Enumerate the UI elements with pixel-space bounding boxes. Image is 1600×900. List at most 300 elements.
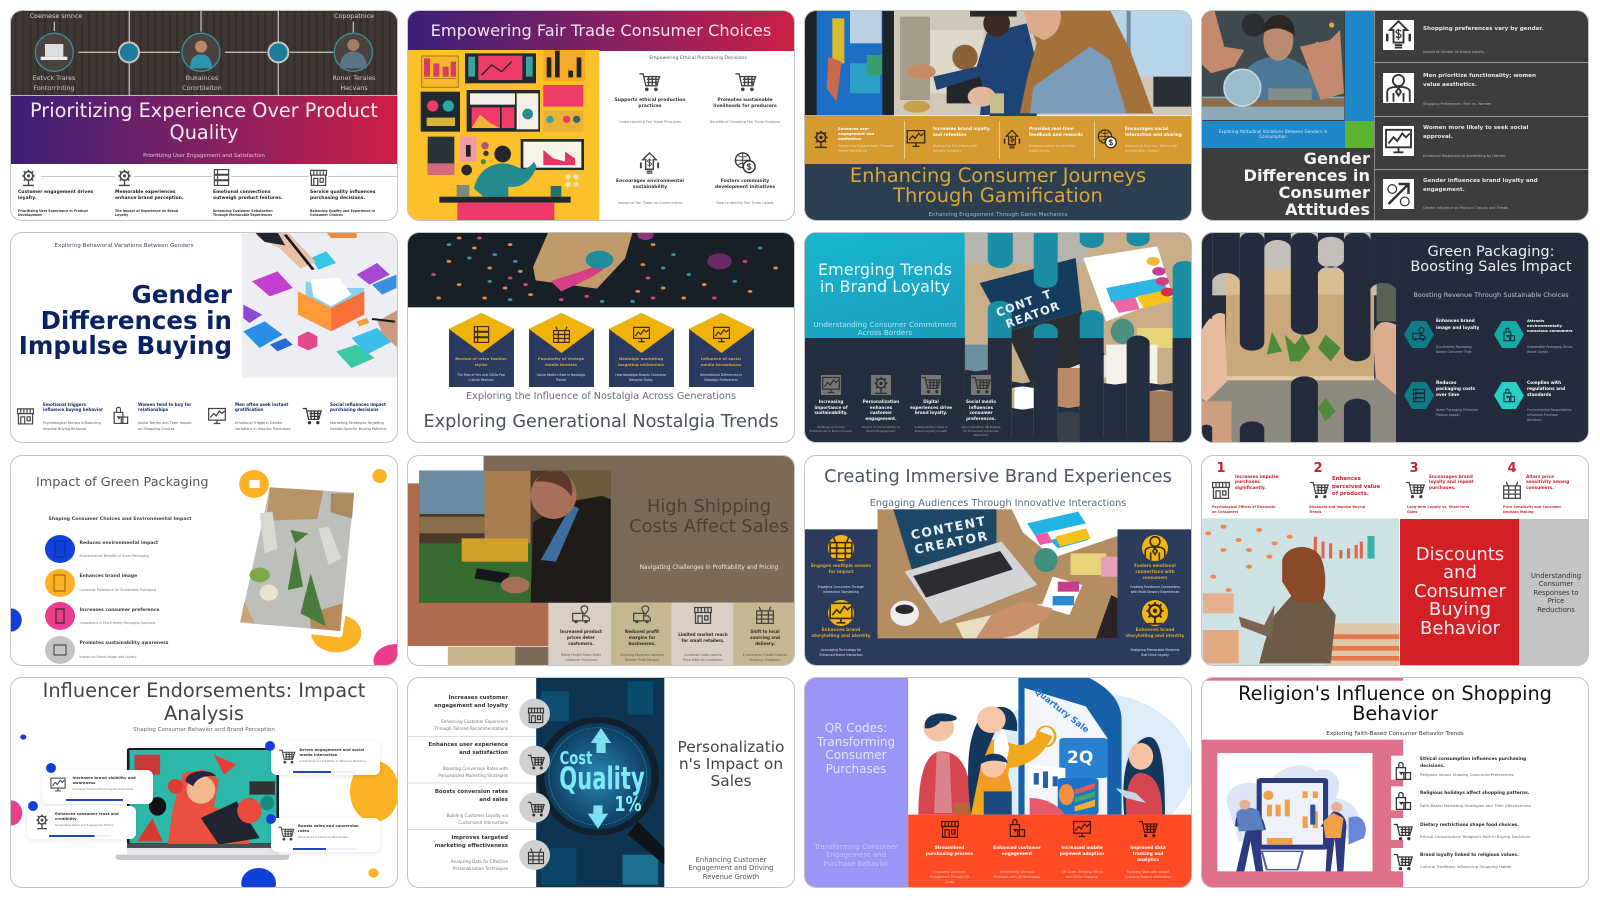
- point 1: [560, 629, 602, 646]
- title: [1410, 245, 1572, 275]
- point 4: Alters price: [1526, 475, 1554, 480]
- point 3: experiences drive: [910, 405, 952, 410]
- point 3: brand loyalty.: [915, 410, 947, 415]
- detail 4: Boosting Sales with Instant: [1127, 870, 1169, 874]
- card 1: [449, 313, 514, 388]
- icon: monitor: [207, 406, 227, 426]
- icon: bag: [111, 405, 130, 426]
- screen text: Quartury Sale: [1032, 687, 1091, 735]
- point 4: [1526, 475, 1569, 491]
- point 1: loyalty.: [18, 196, 37, 201]
- screen text: REATOR: [1004, 298, 1062, 331]
- detail 3: [683, 652, 723, 664]
- title: High Shipping: [647, 496, 771, 517]
- detail 3: Impact of Fair Trade on Communities: [618, 201, 682, 205]
- icon: cart: [639, 73, 660, 92]
- detail 4: Nostalgic Preferences: [704, 378, 738, 382]
- right point 2: [1126, 628, 1184, 640]
- point 2: Reduced profit: [625, 629, 659, 634]
- point 4: sourcing and: [750, 635, 780, 640]
- gold circle icon: [1142, 535, 1168, 561]
- diagram label: [332, 74, 376, 92]
- point 2: [1332, 476, 1380, 498]
- point 2: [625, 629, 659, 646]
- subtitle: Exploring Faith-Based Consumer Behavior Trends: [1326, 731, 1464, 737]
- badge: [46, 763, 56, 773]
- point 1: influence buying behavior: [43, 407, 103, 412]
- icon: truck: [571, 605, 591, 625]
- detail 3: Long-term Loyalty vs. Short-term: [1407, 504, 1469, 508]
- point 3: [678, 632, 728, 644]
- point 2: Popularity of vintage: [538, 356, 584, 361]
- point 2: [863, 399, 899, 421]
- detail 2: Reward Systems: [933, 149, 961, 153]
- detail 2: [994, 870, 1040, 880]
- point 2: Religious holidays affect shopping patterns.: [1420, 791, 1529, 796]
- detail 4: Measuring Success: Metrics for: [1125, 144, 1178, 148]
- point 3: feedback and rewards: [1029, 133, 1083, 138]
- title: Differences in: [41, 306, 232, 334]
- right detail 1: [1130, 584, 1180, 595]
- icon: cart: [302, 406, 322, 426]
- detail 3: [914, 425, 948, 433]
- detail 4: [330, 421, 386, 432]
- point 3: loyalty and repeat: [1429, 480, 1473, 485]
- detail 4: [1125, 870, 1171, 880]
- detail 2: Social Media's Role in Nostalgic: [537, 373, 585, 377]
- left detail 2: Enhanced Brand Interaction: [819, 653, 863, 657]
- divider: [999, 121, 1000, 159]
- detail 1: Understanding Fair Trade Principles: [619, 120, 681, 124]
- title: [850, 164, 1146, 207]
- detail 1: Culture Revivals: [468, 378, 494, 382]
- detail 3: Building Customer Loyalty via: [447, 813, 508, 818]
- icon box: [971, 375, 991, 395]
- card text 1: awareness: [72, 780, 95, 785]
- detail 1: Psychological Effects of Discounts: [1212, 504, 1275, 508]
- divider lines: [41, 176, 397, 177]
- gold band: [804, 116, 1192, 164]
- point 2: [933, 126, 990, 138]
- point 1: Ethical consumption influences purchasing: [1420, 757, 1526, 762]
- point 1: [1420, 757, 1526, 770]
- diagram label: Eetvck Trares: [33, 74, 75, 82]
- icon: cart: [1138, 819, 1158, 839]
- detail 4: Cultural Traditions Influencing Shopping Habits: [1420, 864, 1511, 869]
- row rule: [1374, 116, 1589, 117]
- panel: personalization: [407, 677, 795, 888]
- panel: discounts: [1201, 455, 1589, 666]
- icon: monitor: [49, 776, 67, 793]
- panel: gamification: [804, 10, 1192, 221]
- detail 1: Environmental Benefits of Green Packaging: [80, 554, 149, 558]
- subtitle: Consumption: [1259, 134, 1287, 139]
- point 4: Influence of social: [701, 356, 741, 361]
- detail 4: Environmental Responsibility: [1527, 408, 1572, 412]
- detail 1: Codes: [945, 880, 954, 884]
- left detail 1: Interactive Storytelling: [823, 590, 859, 594]
- subtitle: Shaping Consumer Behavior and Brand Perception: [133, 727, 275, 733]
- title: Creating Immersive Brand Experiences: [824, 466, 1172, 487]
- diagram label: Corortileiton: [182, 84, 222, 92]
- card 2: [529, 313, 594, 388]
- left point 1: Engages multiple senses: [811, 564, 871, 569]
- detail 2: Motivating Purchases with: [933, 144, 977, 148]
- point 1: [43, 402, 103, 412]
- right detail 1: with Multi-Sensory Experiences: [1131, 590, 1179, 594]
- point 4: tracking and: [1133, 852, 1163, 857]
- detail 4: Shipping Challenges: [749, 658, 781, 662]
- point 3: Emotional connections: [213, 190, 271, 195]
- icon box: [921, 375, 941, 395]
- detail 3: [1029, 144, 1075, 153]
- screen text: CONTENT: [909, 513, 988, 542]
- icon: cart: [1405, 480, 1425, 500]
- diagram label: Roner Teraies: [332, 74, 376, 82]
- number 2: 2: [1313, 461, 1323, 476]
- right point 1: consumers: [1142, 575, 1168, 580]
- detail 4: Personalization Strategies: [961, 425, 1001, 429]
- title: Behavior: [1352, 702, 1438, 725]
- point 3: and sales: [479, 797, 508, 803]
- detail 3: Emotional Triggers: Gender: [235, 421, 283, 425]
- left point 1: for impact: [829, 570, 853, 575]
- panel: gender attitudes: [1201, 10, 1589, 221]
- title: Quality: [170, 121, 238, 144]
- title: Buying: [1429, 599, 1491, 620]
- detail 3: Personalization in Gamified: [1029, 144, 1075, 148]
- panel: green packaging sales: [1201, 232, 1589, 443]
- point 2: and satisfaction: [459, 750, 508, 756]
- point 3: [618, 356, 664, 368]
- point 3: Reduces: [1436, 381, 1456, 386]
- point 4: Service quality influences: [310, 190, 375, 195]
- right point 1: Fosters emotional: [1134, 563, 1176, 568]
- point 1: [1235, 475, 1279, 491]
- point 3: Digital: [923, 399, 939, 404]
- detail 1: [18, 208, 88, 217]
- right point 1: [1134, 563, 1176, 581]
- point 2: Enhances brand image: [80, 574, 137, 579]
- icon: globe: [632, 325, 651, 344]
- point 4: [1125, 126, 1182, 138]
- point 2: Promotes sustainable: [717, 98, 773, 103]
- detail 3: Customized Interactions: [458, 820, 508, 825]
- point 1: customers.: [568, 641, 594, 646]
- subtitle: Across Borders: [858, 328, 912, 337]
- circle icon: [45, 636, 75, 664]
- title: in Brand Loyalty: [820, 277, 950, 296]
- subtitle: Prioritizing User Engagement and Satisfaction: [143, 153, 265, 159]
- detail 2: Impact of Social Media on: [862, 425, 900, 429]
- point 3: [1429, 475, 1473, 491]
- subtitle: [689, 856, 773, 881]
- icon: cart: [277, 825, 295, 842]
- screen text: CONT T: [994, 286, 1054, 320]
- icon: store: [693, 605, 713, 625]
- point 4: Brand loyalty linked to religious values.: [1420, 853, 1519, 858]
- laptop illustration and decorative circles: [10, 677, 398, 888]
- icon: bag: [1393, 761, 1413, 781]
- point 1: engagement and loyalty: [434, 703, 508, 709]
- point 2: Attracts: [1527, 318, 1544, 323]
- subtitle: Exploring the Influence of Nostalgia Across Generations: [466, 391, 736, 402]
- detail 4: [961, 425, 1001, 438]
- title: Costs Affect Sales: [629, 516, 789, 537]
- subtitle: Purchase Behavior: [823, 860, 889, 868]
- detail 2: [115, 208, 178, 217]
- badge: [266, 814, 276, 824]
- point 3: packaging costs: [1436, 387, 1475, 392]
- icon: dollar house: [640, 152, 660, 174]
- divider: [1094, 121, 1095, 159]
- hexagon icon: [1494, 382, 1524, 409]
- icon: presentation: [712, 325, 731, 344]
- title: [30, 99, 378, 144]
- point 3: Boosts conversion rates: [435, 789, 508, 795]
- point 3: [1029, 126, 1083, 138]
- icon: rows: [472, 325, 491, 344]
- detail 4: [310, 208, 375, 217]
- title: [1238, 684, 1552, 724]
- icon: cart: [1393, 822, 1413, 842]
- icon: monitor: [1072, 819, 1092, 839]
- icon: cart: [735, 73, 756, 92]
- point 1: [18, 190, 93, 201]
- panel: impact of green packaging: [10, 455, 398, 666]
- icon: store: [940, 819, 960, 839]
- title: Religion's Influence on Shopping: [1238, 682, 1552, 705]
- detail 4: [1125, 144, 1178, 153]
- icon: gear: [814, 130, 828, 148]
- detail 3: Behavior Today: [629, 378, 653, 382]
- row rule: [1374, 169, 1589, 170]
- title: QR Codes:: [825, 721, 887, 735]
- detail 4: Retention: [974, 433, 988, 437]
- illustration: family and phone: [804, 677, 1192, 888]
- title: Enhancing Consumer Journeys: [850, 164, 1146, 187]
- point 2: customer: [870, 410, 892, 415]
- icon: monitor: [906, 130, 926, 147]
- subtitle: Enhancing Engagement Through Game Mechanics: [928, 212, 1068, 218]
- detail 4: [1503, 504, 1561, 514]
- left point 2: storytelling and identity: [812, 634, 870, 639]
- lens text: quality: Quality: [559, 761, 645, 797]
- gold circle icon: [828, 535, 854, 561]
- detail 2: Retailer Profit Margins: [625, 658, 659, 662]
- hexagon icon: [1494, 321, 1524, 348]
- icon glyph: [1501, 327, 1517, 342]
- point 1: Streamlined: [935, 846, 964, 851]
- subtitle: Understanding Consumer Commitment: [813, 320, 957, 329]
- detail 2: Streamlining Checkout: [999, 870, 1035, 874]
- point 4: [966, 399, 996, 421]
- point 1: sustainability.: [814, 410, 848, 415]
- point 3: Limited market reach: [678, 632, 728, 637]
- point 4: [1130, 846, 1166, 864]
- detail 3: Green Packaging Enhances: [1436, 408, 1478, 412]
- point 2: Women tend to buy for: [138, 402, 191, 407]
- point 1: [814, 399, 848, 416]
- icon: cart: [278, 748, 296, 765]
- card bar 3: [293, 770, 356, 772]
- icon: bag: [1007, 818, 1027, 838]
- icon: film: [527, 847, 545, 865]
- green square: [1345, 121, 1374, 148]
- detail 2: Shopping Preferences: Men vs. Women: [1423, 102, 1491, 106]
- title: Impulse Buying: [19, 331, 232, 360]
- detail 1: [43, 421, 101, 432]
- point 1: Customer engagement drives: [18, 190, 93, 195]
- detail 1: Consumer Purchases: [565, 658, 597, 662]
- row rule: [1374, 62, 1589, 63]
- point 4: Social media: [966, 399, 996, 404]
- detail 2: Personalized Marketing Strategies: [438, 773, 508, 778]
- number 3: 3: [1409, 461, 1419, 476]
- point 1: Shopping preferences vary by gender.: [1423, 26, 1543, 32]
- detail 2: Discounts and Impulse Buying: [1309, 504, 1365, 508]
- detail 2: [1527, 345, 1573, 355]
- title: Impact of Green Packaging: [36, 475, 209, 490]
- right detail 1: Creating Emotional Connections: [1130, 584, 1180, 588]
- illustration: dashboards and analyst: [408, 50, 600, 220]
- circle icon: [45, 602, 75, 630]
- detail 2: [620, 652, 664, 664]
- detail 3: Brand Loyalty Growth: [915, 429, 947, 433]
- point 2: livelihoods for producers: [713, 104, 777, 109]
- red panel: [1400, 519, 1519, 667]
- bottom band: [804, 164, 1192, 222]
- subtitle: Shaping Consumer Choices and Environmental Impact: [48, 517, 192, 522]
- detail 1: [809, 425, 853, 433]
- subtitle: Engagement and: [826, 851, 886, 859]
- icon: film: [552, 325, 571, 344]
- detail 2: [138, 421, 192, 432]
- detail 1: [457, 373, 505, 384]
- detail 1: [434, 719, 508, 733]
- detail 1: The Rise of 90s and 2000s Pop: [457, 373, 505, 377]
- subtitle: [813, 321, 957, 338]
- point 2: [713, 98, 777, 109]
- point 2: [993, 846, 1041, 858]
- detail 4: Consumer Choices: [310, 213, 343, 217]
- point 2: Personalization: [863, 399, 899, 404]
- detail 1: Impulse Buying Behavior: [43, 427, 87, 431]
- detail 2: [438, 766, 508, 780]
- detail 4: Analyzing Data for Effective: [451, 859, 508, 864]
- detail 2: Brand Loyalty: [1527, 350, 1548, 354]
- title: [818, 261, 952, 295]
- panel: immersive experiences: [804, 455, 1192, 666]
- point 3: targeting millennials: [618, 362, 664, 367]
- point 2: businesses.: [628, 641, 656, 646]
- detail 2: Loyalty: [115, 213, 128, 217]
- detail 4: Decisions: [1527, 418, 1542, 422]
- detail 2: [862, 425, 900, 433]
- hexagon icon: [1404, 321, 1434, 348]
- title: Differences in: [1244, 166, 1370, 185]
- point 2: relationships: [138, 407, 168, 412]
- number 4: 4: [1507, 461, 1517, 476]
- card text 2: [55, 811, 119, 821]
- title: Prioritizing Experience Over Product: [30, 99, 378, 122]
- detail 2: The Impact of Experience on Brand: [115, 208, 178, 212]
- point 2: Enhances user experience: [428, 742, 508, 748]
- detail 1: [561, 652, 601, 664]
- hexagon icon: [1404, 382, 1434, 409]
- photo: man with clock: [1202, 11, 1344, 120]
- point 1: Reduces environmental impact: [80, 541, 158, 546]
- title: Boosting Sales Impact: [1410, 259, 1572, 275]
- detail 1: [930, 870, 969, 884]
- detail 3: Gains: [1407, 510, 1417, 514]
- icon: film: [755, 605, 775, 625]
- icon: store: [1211, 480, 1231, 500]
- icon: truck: [632, 605, 652, 625]
- card text 3: [300, 746, 364, 757]
- point 3: sustainability: [633, 185, 667, 190]
- point 2: [538, 356, 584, 368]
- point 2: Enhanced customer: [993, 846, 1041, 851]
- detail 2: Social Norms and Their Impact: [138, 421, 192, 425]
- point 1: [1436, 319, 1479, 332]
- title: Sales: [711, 772, 751, 790]
- point 4: Encourages social: [1125, 127, 1169, 132]
- detail 4: Balancing Quality and Experience in: [310, 208, 375, 212]
- point 3: Encourages environmental: [616, 179, 684, 184]
- point 2: perceived value: [1332, 484, 1380, 490]
- detail 3: [1407, 504, 1469, 514]
- icon: gears: [19, 168, 38, 187]
- gold circle icon: [828, 600, 854, 626]
- point 4: purchasing decisions.: [310, 196, 365, 201]
- icon: gear: [33, 813, 51, 830]
- point 3: [1436, 381, 1475, 400]
- card text 3: media interaction: [300, 752, 337, 757]
- point 4: purchasing decisions: [330, 407, 379, 412]
- icon: cart: [527, 800, 545, 818]
- detail 4: Personalization Techniques: [453, 866, 508, 871]
- screen code text: 2Q: [1067, 748, 1093, 768]
- point 4: engagement.: [1423, 187, 1465, 193]
- icon: rows: [212, 168, 231, 187]
- title: [43, 680, 365, 725]
- point 2: media formats: [545, 362, 577, 367]
- point 2: enhance brand perception.: [115, 196, 184, 201]
- lens text: percent: 1%: [614, 792, 642, 816]
- title: Transforming: [817, 734, 895, 748]
- diagram label: Coemese smnce: [30, 12, 82, 20]
- subtitle: Exploring Attitudinal Variations Between Genders in: [1219, 129, 1327, 134]
- point 4: [701, 356, 741, 368]
- title: Consumer: [1414, 580, 1506, 602]
- point 2: engagement: [1002, 852, 1032, 857]
- panel: religion: [1201, 677, 1589, 888]
- diagram label: Hecvans: [340, 84, 368, 92]
- detail 3: Increased Costs Lead to: [684, 652, 722, 656]
- subtitle: [814, 843, 898, 868]
- point 4: development initiatives: [715, 185, 775, 190]
- panel: impulse buying: [10, 232, 398, 443]
- panel: fair trade: [407, 10, 795, 221]
- icon box: [871, 375, 891, 395]
- diagram label: [33, 74, 75, 92]
- point 1: practices: [638, 104, 662, 109]
- photo: paper bag and confetti: [407, 232, 795, 443]
- point 2: Increases brand loyalty: [933, 127, 990, 132]
- point 2: engagement.: [865, 416, 897, 421]
- screen text: [909, 513, 991, 557]
